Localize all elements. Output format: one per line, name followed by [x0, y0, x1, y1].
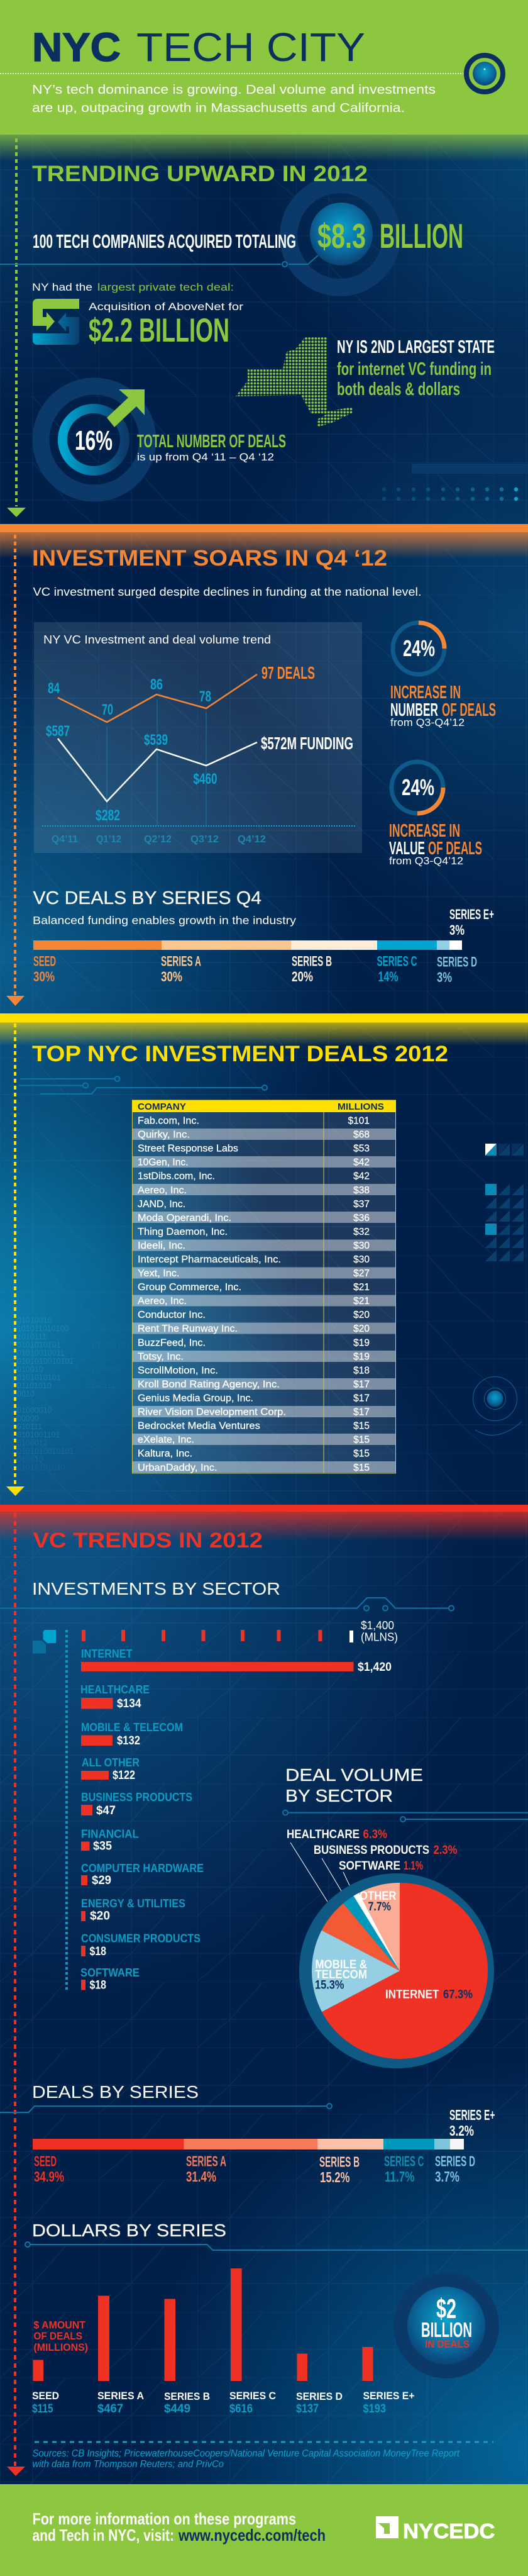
binary text: 0010: [17, 1390, 35, 1398]
circuit line: [0, 2104, 332, 2112]
chart: deals by series stacked bar: SERIES B: [319, 2154, 360, 2170]
bar: business products: [81, 1791, 192, 1817]
slice: other: [359, 1883, 400, 1971]
company names: Quirky, Inc.: [138, 1130, 190, 1140]
chart: deals by series stacked bar: 31.4%: [186, 2168, 216, 2185]
chart: Q4 series stacked bar: 20%: [292, 969, 313, 984]
logo: NYCEDC: [376, 2516, 495, 2543]
binary text: 0101010101: [86, 1341, 130, 1349]
callout: 2 billion in deals: IN DEALS: [425, 2338, 470, 2350]
pie labels: TELECOM: [316, 1968, 367, 1982]
section band: yellow: [0, 1013, 528, 1045]
table header: [132, 1100, 396, 1112]
company names: Group Commerce, Inc.: [138, 1282, 241, 1293]
deal labels: $539: [144, 732, 168, 749]
sources: Sources: CB Insights; PricewaterhouseCoopers/National Venture Capital Association MoneyTree Report: [33, 2448, 460, 2459]
binary text: 0101001101: [17, 1430, 60, 1439]
callout: 2 billion in deals: BILLION: [421, 2318, 472, 2341]
company names: Totsy, Inc.: [138, 1351, 184, 1362]
deal labels: 78: [199, 688, 211, 705]
bar: consumer products: CONSUMER PRODUCTS: [81, 1932, 201, 1945]
title: [32, 25, 365, 70]
binary text: 01010010: [17, 1316, 52, 1325]
callout: 2 billion in deals: [393, 2273, 499, 2378]
slice: software: [353, 1893, 400, 1971]
chart: deals by series stacked bar: 3.7%: [435, 2168, 459, 2185]
bar: healthcare: [80, 1683, 150, 1710]
stat: value of deals: VALUE: [389, 839, 425, 859]
icon: target ball: [473, 1376, 522, 1435]
company names: Ideeli, Inc.: [138, 1241, 185, 1251]
callout: 2 billion in deals: $2: [436, 2294, 456, 2324]
series values: $137: [296, 2402, 319, 2416]
amounts: $37: [353, 1199, 370, 1210]
bars: [33, 2268, 373, 2381]
company names: River Vision Development Corp.: [138, 1407, 286, 1418]
series labels: SEED: [32, 2390, 59, 2402]
axis caption: [34, 2319, 88, 2353]
chart: Q4 series stacked bar: SERIES E+: [449, 906, 494, 922]
company names: Aereo, Inc.: [138, 1185, 187, 1196]
chart: investments by sector: [33, 1619, 398, 1992]
amounts: $19: [353, 1337, 370, 1348]
chart: deals by series stacked bar: SERIES E+: [449, 2107, 495, 2123]
footer text: and Tech in NYC, visit:: [33, 2526, 174, 2545]
amounts: $32: [353, 1227, 370, 1237]
icon: swap arrows: [33, 299, 79, 345]
heading: VC deals by series: Balanced funding enables growth in the industry: [33, 914, 296, 927]
icon: header target: [466, 55, 503, 92]
pie outer labels: 2.3%: [434, 1844, 458, 1857]
pie labels: 7.7%: [368, 1900, 391, 1914]
company names: UrbanDaddy, Inc.: [138, 1463, 217, 1473]
series values: $115: [32, 2402, 53, 2416]
binary text: 1010111: [17, 1332, 47, 1341]
bar: consumer products: $18: [89, 1945, 106, 1958]
bar: business products: $47: [96, 1804, 116, 1817]
bar: computer hardware: COMPUTER HARDWARE: [81, 1862, 204, 1875]
deal labels: 84: [48, 680, 60, 697]
amounts: $42: [353, 1157, 370, 1168]
bar: energy and utilities: ENERGY & UTILITIES: [81, 1897, 185, 1910]
company names: Yext, Inc.: [138, 1268, 180, 1279]
series values: $616: [229, 2402, 253, 2416]
heading: top NYC investment deals: TOP NYC INVESTMENT DEALS 2012: [32, 1042, 448, 1066]
pie labels: 67.3%: [443, 1988, 473, 2002]
pie outer labels: 6.3%: [363, 1828, 387, 1841]
axis max label: $1,400: [361, 1619, 394, 1632]
deal labels: 70: [102, 701, 113, 718]
line: deals: [58, 674, 257, 722]
bar: software: SOFTWARE: [80, 1966, 140, 1979]
header subtitle: [32, 83, 436, 115]
bar: mobile and telecom: MOBILE & TELECOM: [81, 1721, 183, 1734]
icon: sector chart: [33, 1630, 56, 1653]
callout: 8.3 billion: BILLION: [380, 216, 463, 255]
amounts: $18: [353, 1365, 370, 1376]
axis caption: OF DEALS: [34, 2330, 82, 2342]
pie outer labels: SOFTWARE: [339, 1860, 400, 1873]
amounts: $20: [353, 1310, 370, 1320]
axis max label: (MLNS): [361, 1631, 398, 1643]
pie outer labels: 1.1%: [404, 1860, 423, 1873]
amounts: $53: [353, 1144, 370, 1154]
amounts: $30: [353, 1241, 370, 1251]
leader lines: [290, 1843, 349, 1902]
binary text: 0101010010101: [17, 1357, 74, 1366]
company names: Bedrocket Media Ventures: [138, 1421, 260, 1432]
amounts: $21: [353, 1282, 370, 1293]
logo: NYCEDC: NYCEDC: [403, 2519, 495, 2543]
pie labels: INTERNET: [385, 1988, 439, 2002]
series values: $449: [164, 2402, 190, 2416]
chart: deals by series stacked bar: 34.9%: [34, 2168, 64, 2185]
quarter labels: [52, 834, 266, 845]
callout: 8.3 billion: $8.3: [317, 216, 366, 255]
binary text: 010010: [17, 1455, 43, 1464]
amounts: $15: [353, 1463, 370, 1473]
axis ticks: [82, 1630, 353, 1642]
chart: deals by series stacked bar: 15.2%: [320, 2169, 349, 2185]
heading: deal volume by sector: BY SECTOR: [285, 1786, 393, 1805]
company names: ScrollMotion, Inc.: [138, 1365, 218, 1376]
header dotted line: [0, 73, 463, 74]
stat: number of deals: [390, 623, 496, 728]
binary text: 0100012: [17, 1439, 48, 1447]
amounts: $30: [353, 1254, 370, 1265]
callout: abovenet: Acquisition of AboveNet for: [89, 301, 243, 313]
amounts: $19: [353, 1351, 370, 1362]
company names: eXelate, Inc.: [138, 1435, 194, 1446]
arrow: red dashed: [7, 1513, 25, 2476]
text: NY 2nd largest state: both deals & dollars: [337, 379, 460, 399]
callout: 16 percent ring: is up from Q4 ‘11 – Q4 ‘12: [137, 451, 274, 463]
chart: Q4 series stacked bar: 3%: [449, 922, 465, 938]
chart: deals by series stacked bar: SEED: [34, 2153, 57, 2169]
circuit lines: [283, 1810, 528, 1822]
callout: 8.3 billion: [0, 184, 463, 287]
stat: number of deals: INCREASE IN: [390, 683, 461, 703]
decorative squares: [485, 1144, 524, 1261]
amounts: $15: [353, 1449, 370, 1459]
slice: internet: [322, 1883, 488, 2059]
pie labels: [315, 1890, 473, 2002]
heading: deal volume by sector: [285, 1765, 423, 1805]
company names: Conductor Inc.: [138, 1310, 206, 1320]
arrow: orange dotted: [6, 535, 25, 1006]
heading: dollars by series: DOLLARS BY SERIES: [32, 2221, 226, 2240]
amounts: [348, 1116, 370, 1473]
heading: VC deals by series: [33, 888, 296, 927]
pie labels: OTHER: [360, 1890, 397, 1903]
callout: abovenet: $2.2 BILLION: [89, 312, 229, 349]
chart: dollars by series: [32, 2268, 415, 2416]
table header: COMPANY: [138, 1101, 186, 1112]
quarter labels: Q1’12: [96, 834, 121, 845]
chart: deals by series stacked bar: [33, 2107, 495, 2185]
chart: Q4 series stacked bar: 3%: [437, 969, 452, 985]
callout: 8.3 billion: 100 TECH COMPANIES ACQUIRED TOTALING: [33, 230, 296, 252]
chart: deals by series stacked bar: 3.2%: [449, 2122, 474, 2139]
slice: healthcare: [322, 1904, 400, 1971]
series labels: [32, 2390, 415, 2402]
arrow: yellow dotted: [6, 1023, 25, 1496]
header band: [0, 0, 528, 161]
table header: MILLIONS: [338, 1101, 384, 1112]
text: NY 2nd largest state: [337, 337, 495, 399]
bar: computer hardware: [81, 1862, 204, 1887]
company names: Genius Media Group, Inc.: [138, 1393, 253, 1404]
series labels: SERIES B: [164, 2390, 210, 2402]
series labels: SERIES E+: [363, 2390, 415, 2402]
quarter labels: Q2’12: [144, 834, 172, 845]
series labels: SERIES C: [229, 2390, 276, 2402]
series values: $467: [97, 2402, 123, 2416]
binary text: [17, 1316, 130, 1472]
footer text: For more information on these programs: [33, 2509, 296, 2528]
company names: Kroll Bond Rating Agency, Inc.: [138, 1379, 280, 1390]
callout: 16 percent ring: 16%: [75, 425, 113, 456]
panel: line chart: [34, 622, 362, 853]
binary text: 010010: [17, 1365, 43, 1374]
text: largest private tech deal: [32, 281, 234, 293]
binary text: 01000010: [17, 1406, 52, 1415]
section band: red: [0, 1505, 528, 1541]
chart: deals by series stacked bar: SERIES A: [186, 2153, 226, 2169]
bar: healthcare: HEALTHCARE: [80, 1683, 150, 1696]
binary text: 0101010101: [17, 1373, 61, 1382]
arrow: green dotted: [7, 138, 26, 517]
binary text: 0100111: [86, 1381, 116, 1390]
amounts: $17: [353, 1407, 370, 1418]
series values: [32, 2402, 386, 2416]
slice: mobile and telecom: [312, 1931, 400, 2012]
pie outer labels: HEALTHCARE: [287, 1828, 360, 1841]
binary text: 01010010: [86, 1365, 121, 1374]
amounts: $20: [353, 1324, 370, 1334]
stat: value of deals: INCREASE IN: [389, 821, 460, 841]
stat: value of deals: from Q3-Q4’12: [389, 855, 463, 867]
pie labels: MOBILE &: [316, 1958, 367, 1971]
footer text: [33, 2509, 326, 2545]
circuit lines: [19, 1076, 267, 1094]
bar: internet: INTERNET: [81, 1648, 133, 1660]
text: largest private tech deal: largest private tech deal:: [97, 281, 234, 293]
company names: Intercept Pharmaceuticals, Inc.: [138, 1254, 281, 1265]
heading: VC deals by series: VC DEALS BY SERIES Q4: [33, 888, 261, 908]
header subtitle: are up, outpacing growth in Massachusetts and California.: [32, 101, 405, 115]
circuit line: [25, 2242, 528, 2250]
series values: $193: [363, 2402, 386, 2416]
bar: financial: FINANCIAL: [81, 1828, 139, 1841]
amounts: $17: [353, 1379, 370, 1390]
deal labels: $460: [194, 771, 217, 788]
stat: number of deals: from Q3-Q4’12: [390, 716, 465, 728]
sources: [33, 2448, 460, 2470]
bar: internet: $1,420: [358, 1661, 392, 1674]
title: NYC: [32, 25, 121, 70]
bar: software: [80, 1966, 140, 1992]
title: TECH CITY: [136, 25, 365, 70]
pie outer labels: BUSINESS PRODUCTS: [314, 1844, 429, 1857]
binary text: 00000: [17, 1414, 39, 1423]
decorative dots: [382, 464, 528, 501]
bar: healthcare: $134: [117, 1697, 141, 1710]
chart title: NY VC Investment and deal volume trend: [43, 633, 271, 646]
chart: Q4 series stacked bar: SEED: [33, 954, 56, 969]
binary text: 0101010100: [86, 1324, 130, 1333]
stat: number of deals: 24%: [403, 635, 435, 661]
bar: all other: ALL OTHER: [82, 1756, 140, 1769]
axis caption: $ AMOUNT: [34, 2319, 86, 2331]
footer text: www.nycedc.com/tech: [178, 2526, 326, 2545]
table: investment deals: [132, 1100, 396, 1473]
heading: VC trends: VC TRENDS IN 2012: [33, 1529, 263, 1553]
chart: Q4 series stacked bar: [33, 906, 494, 985]
end labels: [261, 663, 353, 753]
amounts: $68: [353, 1130, 370, 1140]
circuit line: [0, 1598, 454, 1610]
amounts: $21: [353, 1296, 370, 1307]
callout: abovenet: [89, 301, 243, 349]
binary text: 01010101010: [17, 1463, 65, 1472]
sources divider: [35, 2441, 493, 2443]
amounts: $17: [353, 1393, 370, 1404]
company names: 10Gen, Inc.: [138, 1157, 189, 1168]
quarter labels: Q3’12: [190, 834, 219, 845]
amounts: $15: [353, 1435, 370, 1446]
section band: orange: [0, 524, 528, 559]
footer band: [0, 2484, 528, 2576]
amounts: $42: [353, 1171, 370, 1182]
binary text: 01010010011: [17, 1349, 65, 1358]
heading: trending upward: TRENDING UPWARD IN 2012: [32, 162, 368, 186]
binary text: 0101010010101: [17, 1447, 74, 1456]
callout: 16 percent ring: [41, 386, 286, 493]
callout: 16 percent ring: TOTAL NUMBER OF DEALS: [137, 432, 286, 452]
amounts: $27: [353, 1268, 370, 1279]
amounts: $101: [348, 1116, 370, 1126]
chart: deals by series stacked bar: 11.7%: [385, 2168, 415, 2185]
bar: mobile and telecom: [81, 1721, 183, 1748]
company names: Rent The Runway Inc.: [138, 1324, 238, 1334]
slice: business products: [343, 1896, 400, 1971]
company names: Fab.com, Inc.: [138, 1116, 199, 1126]
bar: financial: $35: [93, 1839, 112, 1853]
bar: software: $18: [89, 1979, 106, 1992]
line: funding: [58, 739, 257, 801]
icon: dotted New York state map: [236, 337, 352, 427]
amounts: $38: [353, 1185, 370, 1196]
chart: Q4 series stacked bar: SERIES B: [292, 954, 332, 969]
stat: number of deals: NUMBER: [390, 700, 438, 720]
header subtitle: NY’s tech dominance is growing. Deal volume and investments: [32, 83, 436, 97]
bar: mobile and telecom: $132: [117, 1734, 140, 1748]
binary text: 010111: [17, 1422, 42, 1431]
bar: energy and utilities: [81, 1897, 185, 1922]
deal labels: $587: [46, 723, 70, 740]
quarter labels: Q4’12: [238, 834, 266, 845]
chart: Q4 series stacked bar: SERIES A: [161, 954, 201, 969]
binary text: 01101010: [17, 1381, 52, 1390]
deal labels: $282: [96, 807, 120, 824]
stat: value of deals: 24%: [402, 774, 434, 800]
text: VC investment surged: VC investment surged despite declines in funding at the national level.: [33, 586, 421, 598]
bar: all other: $122: [113, 1769, 135, 1782]
company names: Thing Daemon, Inc.: [138, 1227, 228, 1237]
bar: energy and utilities: $20: [90, 1910, 110, 1922]
text: largest private tech deal: NY had the: [32, 281, 92, 293]
heading: deals by series: DEALS BY SERIES: [32, 2082, 199, 2102]
chart: Q4 series stacked bar: SERIES D: [437, 954, 477, 970]
series labels: SERIES A: [97, 2390, 144, 2402]
amounts: $36: [353, 1213, 370, 1224]
company names: BuzzFeed, Inc.: [138, 1337, 206, 1348]
chart: Q4 series stacked bar: 14%: [378, 969, 399, 984]
bar: all other: [81, 1756, 140, 1782]
chart: Q4 series stacked bar: 30%: [161, 969, 182, 984]
company names: Aereo, Inc.: [138, 1296, 187, 1307]
bar: financial: [81, 1828, 139, 1853]
sources: with data from Thompson Reuters; and PrivCo: [33, 2459, 224, 2470]
end labels: 97 DEALS: [261, 663, 315, 683]
series labels: SERIES D: [296, 2390, 343, 2402]
deal labels: [46, 676, 217, 824]
chart: deals by series stacked bar: SERIES D: [435, 2153, 475, 2169]
quarter labels: Q4’11: [52, 834, 78, 845]
stat: value of deals: OF DEALS: [428, 839, 482, 859]
chart: Q4 series stacked bar: SERIES C: [377, 954, 417, 969]
stat: value of deals: [389, 762, 482, 867]
axis caption: (MILLIONS): [34, 2341, 88, 2353]
bar: business products: BUSINESS PRODUCTS: [81, 1791, 192, 1804]
heading: investment soars: INVESTMENT SOARS IN Q4 ‘12: [32, 546, 387, 571]
company names: JAND, Inc.: [138, 1199, 185, 1210]
company names: Kaltura, Inc.: [138, 1449, 192, 1459]
pie labels: 15.3%: [315, 1979, 344, 1992]
deal labels: 86: [150, 676, 163, 693]
company names: 1stDibs.com, Inc.: [138, 1171, 215, 1182]
axis max label: [361, 1619, 398, 1643]
binary text: 101011010100: [17, 1324, 69, 1333]
pie chart: deal volume by sector: [287, 1828, 494, 2068]
amounts: $15: [353, 1421, 370, 1432]
heading: deal volume by sector: DEAL VOLUME: [285, 1765, 423, 1785]
company names: Moda Operandi, Inc.: [138, 1213, 231, 1224]
bar: internet: [81, 1648, 392, 1674]
company names: [138, 1116, 286, 1473]
pie outer labels: [287, 1828, 458, 1873]
bar: computer hardware: $29: [92, 1874, 111, 1887]
chart: deals by series stacked bar: SERIES C: [384, 2153, 424, 2169]
end labels: $572M FUNDING: [261, 733, 353, 753]
chart: Q4 series stacked bar: 30%: [33, 969, 55, 984]
heading: investments by sector: INVESTMENTS BY SECTOR: [32, 1579, 280, 1598]
company names: Street Response Labs: [138, 1144, 238, 1154]
bar: consumer products: [81, 1932, 201, 1958]
binary text: 0101010101: [17, 1341, 61, 1349]
